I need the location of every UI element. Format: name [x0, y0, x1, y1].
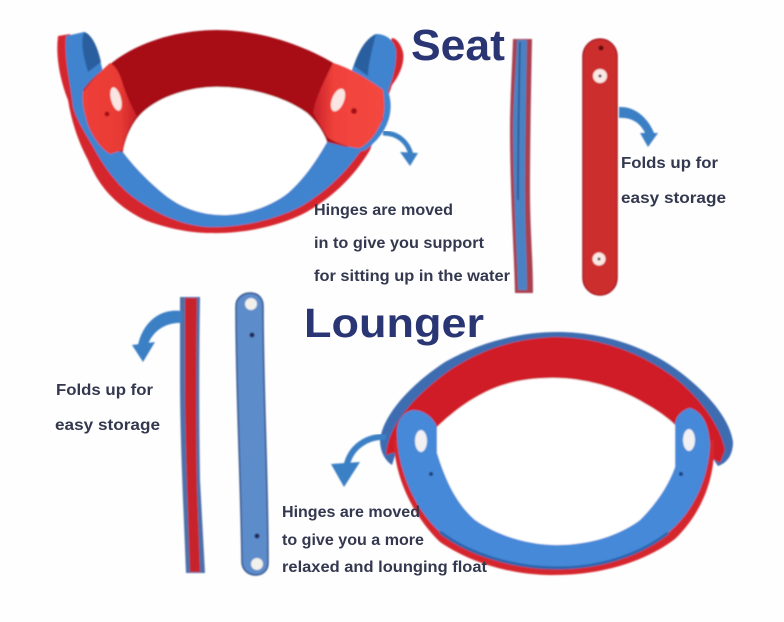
seat dark blue tip shading: [82, 32, 376, 76]
seat lower blue band: [66, 32, 396, 227]
icon: seat hinge arrow: [383, 133, 418, 166]
lounger outer red lower shell: [394, 440, 714, 575]
lounger dark lower edge: [440, 532, 668, 568]
lounger outer blue back edge: [380, 332, 733, 466]
lounger hinge text: to give you a more: [282, 532, 424, 549]
lounger centre opening: [437, 378, 675, 545]
seat centre opening: [123, 87, 327, 215]
seat hinge holes: [108, 86, 124, 112]
lounger red band: [386, 337, 725, 463]
lounger hinge text: relaxed and lounging float: [282, 559, 488, 576]
seat hinge text: in to give you support: [314, 235, 485, 252]
icon: seat fold arrow: [619, 107, 658, 147]
seat side view strip: [510, 39, 533, 293]
seat top red band: [83, 30, 383, 152]
heading: Seat: Seat: [411, 21, 505, 70]
seat hinge text: for sitting up in the water: [314, 268, 510, 285]
lounger front view strip: [236, 293, 268, 575]
icon: lounger hinge arrow: [331, 437, 386, 487]
seat outer red shell: [57, 34, 403, 233]
seat front view strip: [583, 39, 617, 295]
seat hinge text: [314, 202, 510, 285]
icon: lounger fold arrow: [132, 311, 182, 362]
seat fold text: easy storage: [621, 190, 726, 207]
seat hinge text: Hinges are moved: [314, 202, 453, 219]
lounger fold text: [55, 382, 160, 434]
heading: Lounger: Lounger: [304, 300, 484, 346]
lounger blue lower band: [397, 408, 710, 568]
lounger hinge holes: [415, 430, 427, 452]
seat fold text: Folds up for: [621, 155, 718, 172]
seat right hinge panel: [313, 63, 384, 148]
seat left hinge panel: [83, 63, 137, 154]
lounger side view strip: [180, 297, 205, 573]
lounger hinge text: [282, 504, 488, 576]
seat fold text: [621, 155, 726, 207]
lounger fold text: Folds up for: [56, 382, 153, 399]
seat blue rim right: [347, 90, 388, 151]
seat float illustration: [57, 30, 403, 233]
lounger fold text: easy storage: [55, 417, 160, 434]
lounger hinge text: Hinges are moved: [282, 504, 420, 521]
lounger float illustration: [380, 332, 733, 575]
